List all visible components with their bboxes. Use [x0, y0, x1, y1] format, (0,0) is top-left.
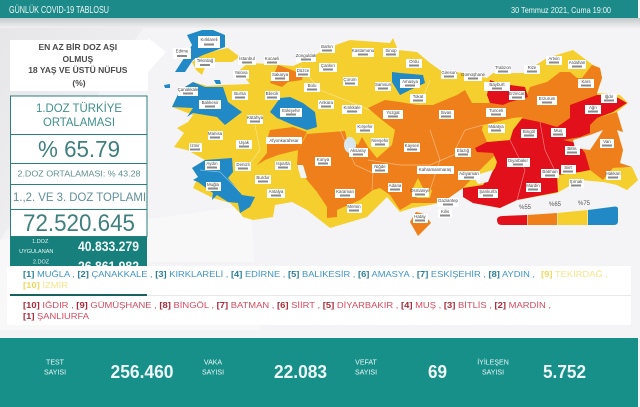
province name labels: Burdur [256, 175, 270, 180]
panel: total doses heading [10, 184, 147, 210]
region: orange provinces [257, 65, 632, 236]
panel: first dose percentage [10, 134, 147, 164]
province name labels: Zonguldak [296, 53, 317, 58]
province border lines [200, 66, 557, 200]
region: inner yellow provinces [363, 117, 638, 198]
panel: province lists [7, 262, 631, 325]
province name labels: Konya [317, 157, 330, 162]
province name labels: Kayseri [405, 143, 419, 148]
legend: vaccination scale [497, 201, 618, 225]
province name labels: Sinop [385, 48, 397, 53]
province name labels: Afyonkarahisar [269, 138, 299, 143]
callout: adult population title with arrow [10, 38, 166, 91]
province name labels: Iğdır [605, 94, 614, 99]
panel: second dose average [10, 164, 147, 184]
panel: doses administered: 1.DOZ [32, 239, 49, 245]
province name labels: Ağrı [589, 105, 597, 110]
province name labels: Nevşehir [371, 138, 389, 143]
header bar [0, 0, 640, 28]
stat: cases: 22.083 [274, 362, 327, 382]
panel: first dose percentage: % 65.79 [38, 136, 120, 162]
province name labels: Kastamonu [352, 48, 375, 53]
list: highest vaccination provinces: [10] İZMİR [23, 280, 68, 290]
province name labels: Çanakkale [178, 87, 199, 92]
province name labels: Edirne [176, 48, 189, 54]
panel: first dose national average [10, 96, 147, 134]
panel: first dose national average: 1.DOZ TÜRKİYE [36, 102, 122, 115]
stat: recoveries: SAYISI [482, 370, 504, 376]
list: highest vaccination provinces: [1] MUĞLA , [2] ÇANAKKALE , [3] KIRKLARELİ , [4] EDİRNE , [5] BALIKESİR , [6] AMASYA , [7] ESKİŞEHİR , [8] AYDIN , [23, 269, 535, 279]
map of Turkey by vaccination rate [164, 30, 638, 236]
province name labels: Antalya [269, 189, 284, 194]
callout: adult population title with arrow: (%) [72, 78, 86, 88]
stat: recoveries: 5.752 [543, 362, 586, 382]
stat: cases [202, 360, 327, 382]
province name labels: Bursa [234, 91, 246, 96]
province name labels: Balıkesir [202, 100, 219, 105]
province name labels: Samsun [375, 82, 392, 87]
list: lowest vaccination provinces [23, 300, 551, 321]
province name labels: Uşak [239, 140, 250, 145]
stat: deaths [355, 360, 447, 382]
province name labels: Çorum [343, 77, 357, 82]
lakes [297, 130, 603, 184]
province name labels: Siirt [564, 165, 573, 170]
province name labels: Ardahan [569, 60, 586, 65]
province name labels: İzmir [190, 143, 200, 148]
region: blue provinces [164, 30, 425, 213]
date and time: 30 Temmuz 2021, Cuma 19:00 [511, 5, 611, 15]
panel: doses administered: 40.833.279 [78, 238, 139, 254]
stat: deaths: 69 [428, 362, 447, 382]
province name labels: Muğla [207, 182, 220, 187]
province name labels: Mardin [526, 183, 540, 188]
stat: tests: 256.460 [110, 362, 174, 382]
province name labels: Denizli [236, 162, 250, 167]
stat: cases: SAYISI [202, 370, 224, 376]
panel: second dose average: 2.DOZ ORTALAMASI: % 43.28 [18, 170, 141, 178]
province name labels: Aydın [206, 161, 218, 166]
panel: doses administered: UYGULANAN [19, 249, 53, 255]
province name labels: Osmaniye [410, 188, 430, 193]
panel: doses administered: 2.DOZ [33, 260, 50, 266]
panel: first dose national average: ORTALAMASI [43, 117, 115, 129]
province name labels: Tunceli [489, 108, 503, 113]
province name labels [173, 36, 621, 223]
province name labels: Artvin [548, 56, 560, 61]
province name labels: Bingöl [523, 129, 535, 134]
stat: recoveries: İYİLEŞEN [477, 358, 509, 366]
region: yellow provinces base [172, 38, 638, 228]
list: lowest vaccination provinces: [10] IĞDIR , [9] GÜMÜŞHANE , [8] BİNGÖL , [7] BATMAN , [6] SİİRT , [5] DİYARBAKIR , [4] MUŞ , [3] BİTLİS , [2] MARDİN , [23, 300, 551, 310]
province name labels: Isparta [276, 161, 290, 166]
province name labels: Karaman [336, 189, 354, 194]
province name labels: Eskişehir [282, 108, 300, 113]
province name labels: Çankırı [321, 63, 335, 68]
panel: doses administered [10, 237, 147, 274]
province name labels: Muş [554, 128, 563, 133]
province name labels: Trabzon [495, 65, 512, 70]
stat: cases: VAKA [204, 360, 222, 366]
province name labels: Mersin [347, 204, 361, 209]
province name labels: Kütahya [247, 115, 264, 120]
province name labels: Sivas [441, 110, 452, 115]
province name labels: Kahramanmaraş [419, 167, 452, 172]
province name labels: Ankara [319, 100, 334, 105]
legend: vaccination scale: %75 [578, 201, 591, 207]
callout: adult population title with arrow: OLMUŞ [62, 54, 93, 64]
province name labels: İstanbul [239, 56, 255, 61]
province name labels: Bayburt [489, 82, 505, 87]
panel: total doses heading: 1.,2. VE 3. DOZ TOPLAMI [13, 190, 146, 204]
province name labels: Tokat [413, 94, 424, 99]
province name labels: Amasya [402, 79, 418, 84]
list: highest vaccination provinces [23, 269, 608, 290]
province name labels: Yozgat [386, 110, 400, 115]
province name labels: Rize [528, 65, 537, 70]
province name labels: Kırşehir [357, 124, 373, 129]
province name labels: Bartın [321, 44, 333, 49]
province name labels: Giresun [441, 70, 457, 75]
panel: left statistics column [10, 38, 166, 274]
stat: tests: TEST [46, 360, 65, 366]
province name labels: Kocaeli [265, 56, 279, 61]
province name labels: Kırklareli [200, 37, 218, 42]
panel: doses administered: 26.861.982 [78, 258, 139, 274]
province name labels: Yalova [234, 70, 248, 75]
province name labels: Kilis [441, 209, 450, 214]
province name labels: Ordu [409, 59, 419, 64]
stat: tests: SAYISI [44, 370, 66, 376]
province name labels: Bitlis [567, 146, 577, 151]
province name labels: Gaziantep [438, 198, 459, 203]
province name labels: Erzincan [508, 91, 526, 96]
list: lowest vaccination provinces: [1] ŞANLIURFA [23, 311, 89, 321]
province name labels: Elazığ [457, 148, 470, 153]
province name labels: Kars [581, 79, 591, 84]
stat: recoveries [477, 358, 586, 382]
stat: deaths: SAYISI [355, 370, 377, 376]
callout: adult population title with arrow: 18 YAŞ VE ÜSTÜ NÜFUS [28, 65, 128, 75]
province name labels: Adana [389, 183, 402, 188]
province name labels: Tekirdağ [197, 58, 214, 63]
province name labels: Van [603, 139, 611, 144]
province name labels: Erzurum [539, 96, 556, 101]
panel: total doses number: 72.520.645 [23, 210, 135, 237]
province name labels: Aksaray [350, 148, 367, 153]
province name labels: Bilecik [266, 91, 279, 96]
province name labels: Malatya [488, 124, 504, 129]
province name labels: Niğde [374, 164, 386, 169]
province name labels: Batman [542, 169, 558, 174]
province name labels: Hakkari [606, 171, 620, 176]
province name labels: Sakarya [272, 72, 289, 77]
province name labels: Bolu [308, 83, 317, 88]
region: red provinces [463, 80, 627, 208]
panel: bottom daily figures [0, 338, 638, 407]
province name labels: Şırnak [570, 179, 583, 184]
province name labels: Gümüşhane [461, 72, 486, 77]
stat: tests [44, 360, 174, 382]
legend: vaccination scale: %65 [549, 202, 562, 208]
list: highest vaccination provinces: [9] TEKİRDAĞ , [541, 269, 608, 279]
province name labels: Şanlıurfa [479, 189, 497, 194]
callout: adult population title with arrow: EN AZ BİR DOZ AŞI [38, 42, 117, 52]
province name labels: Kırıkkale [343, 105, 361, 110]
province name labels: Hatay [414, 214, 427, 219]
province name labels: Düzce [297, 68, 310, 73]
legend: vaccination scale: %55 [519, 205, 532, 211]
heading: daily table title: GÜNLÜK COVID-19 TABLOSU [9, 4, 109, 16]
stat: deaths: VEFAT [355, 360, 378, 366]
province name labels: Diyarbakır [508, 158, 529, 163]
province name labels: Adıyaman [459, 171, 479, 176]
province name labels: Manisa [208, 131, 223, 136]
